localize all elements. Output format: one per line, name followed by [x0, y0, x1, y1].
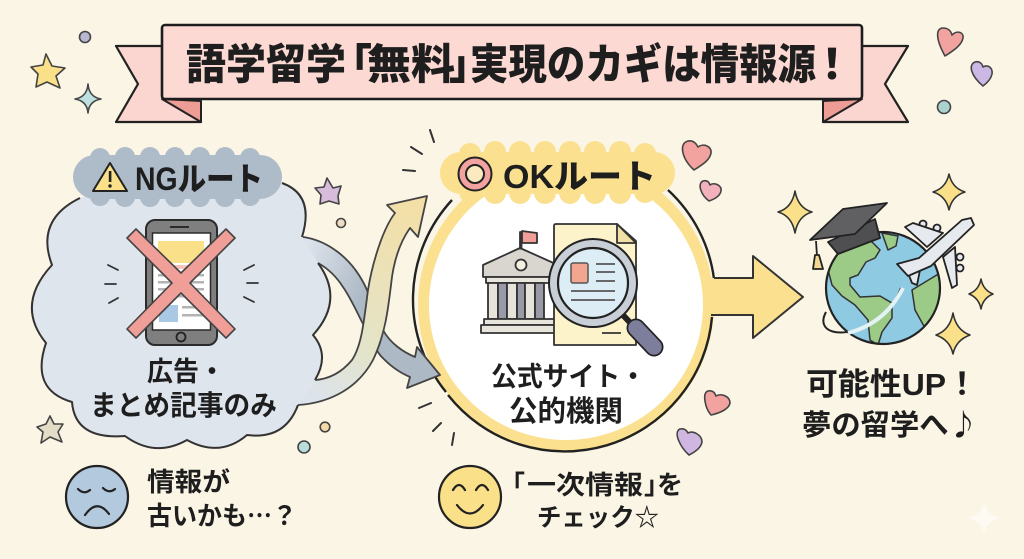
NG route arrow (grey)	[296, 237, 440, 388]
OK route panel	[413, 141, 714, 452]
NG cloud text	[90, 357, 277, 421]
title text: ！	[811, 41, 853, 88]
decorations: top right	[938, 28, 992, 114]
title text: 実現のカギは情報源	[470, 41, 816, 88]
NG route cloud	[32, 147, 330, 448]
icon: sad face	[66, 466, 128, 528]
icon: warning triangle	[93, 163, 127, 191]
decorations around cloud	[37, 178, 346, 453]
OK caption	[499, 470, 683, 532]
middle arrow (yellow)	[298, 196, 427, 405]
title text	[186, 41, 853, 88]
OK heading pill	[440, 141, 675, 204]
globe	[823, 232, 945, 345]
NG caption	[147, 467, 297, 533]
hearts around OK panel	[677, 141, 730, 455]
OK caption: チェック☆	[537, 504, 659, 532]
NG cloud text: まとめ記事のみ	[90, 390, 277, 421]
title text: 」	[449, 41, 491, 88]
icon: double circle	[458, 158, 492, 190]
OK caption: 一次情報	[527, 470, 643, 500]
title banner	[116, 25, 908, 122]
OK heading text: OKルート	[503, 158, 656, 195]
OK caption: 「	[499, 470, 525, 500]
NG caption: 情報が	[147, 467, 230, 497]
OK caption: 」	[644, 470, 670, 500]
icon: crossed out phone	[105, 220, 258, 345]
watermark sparkle	[967, 501, 1001, 535]
graduation cap	[810, 203, 887, 269]
NG heading pill	[73, 147, 282, 207]
icon: smiling face	[439, 466, 501, 528]
decorations: top left	[31, 32, 101, 113]
airplane	[897, 218, 974, 288]
arrow to goal	[706, 256, 803, 338]
OK caption: を	[657, 470, 683, 500]
sparkles around globe	[778, 174, 993, 354]
OK panel text	[491, 362, 646, 428]
NG caption: 古いかも…？	[147, 496, 297, 533]
goal text: 夢の留学へ♪	[802, 402, 978, 444]
title text: 語学留学	[186, 41, 346, 88]
NG heading text: NGルート	[135, 161, 263, 197]
NG cloud text: 広告・	[147, 357, 225, 387]
goal text	[802, 359, 978, 444]
emphasis lines around OK panel	[403, 130, 454, 445]
OK panel text: 公式サイト・	[491, 362, 646, 392]
title text: 無料	[367, 41, 455, 88]
goal text: 可能性UP！	[806, 359, 978, 404]
title text: 「	[330, 41, 372, 88]
icon: building and magnifier on document	[481, 224, 654, 347]
OK panel text: 公的機関	[509, 395, 623, 428]
icon: globe with cap and plane	[810, 203, 974, 345]
